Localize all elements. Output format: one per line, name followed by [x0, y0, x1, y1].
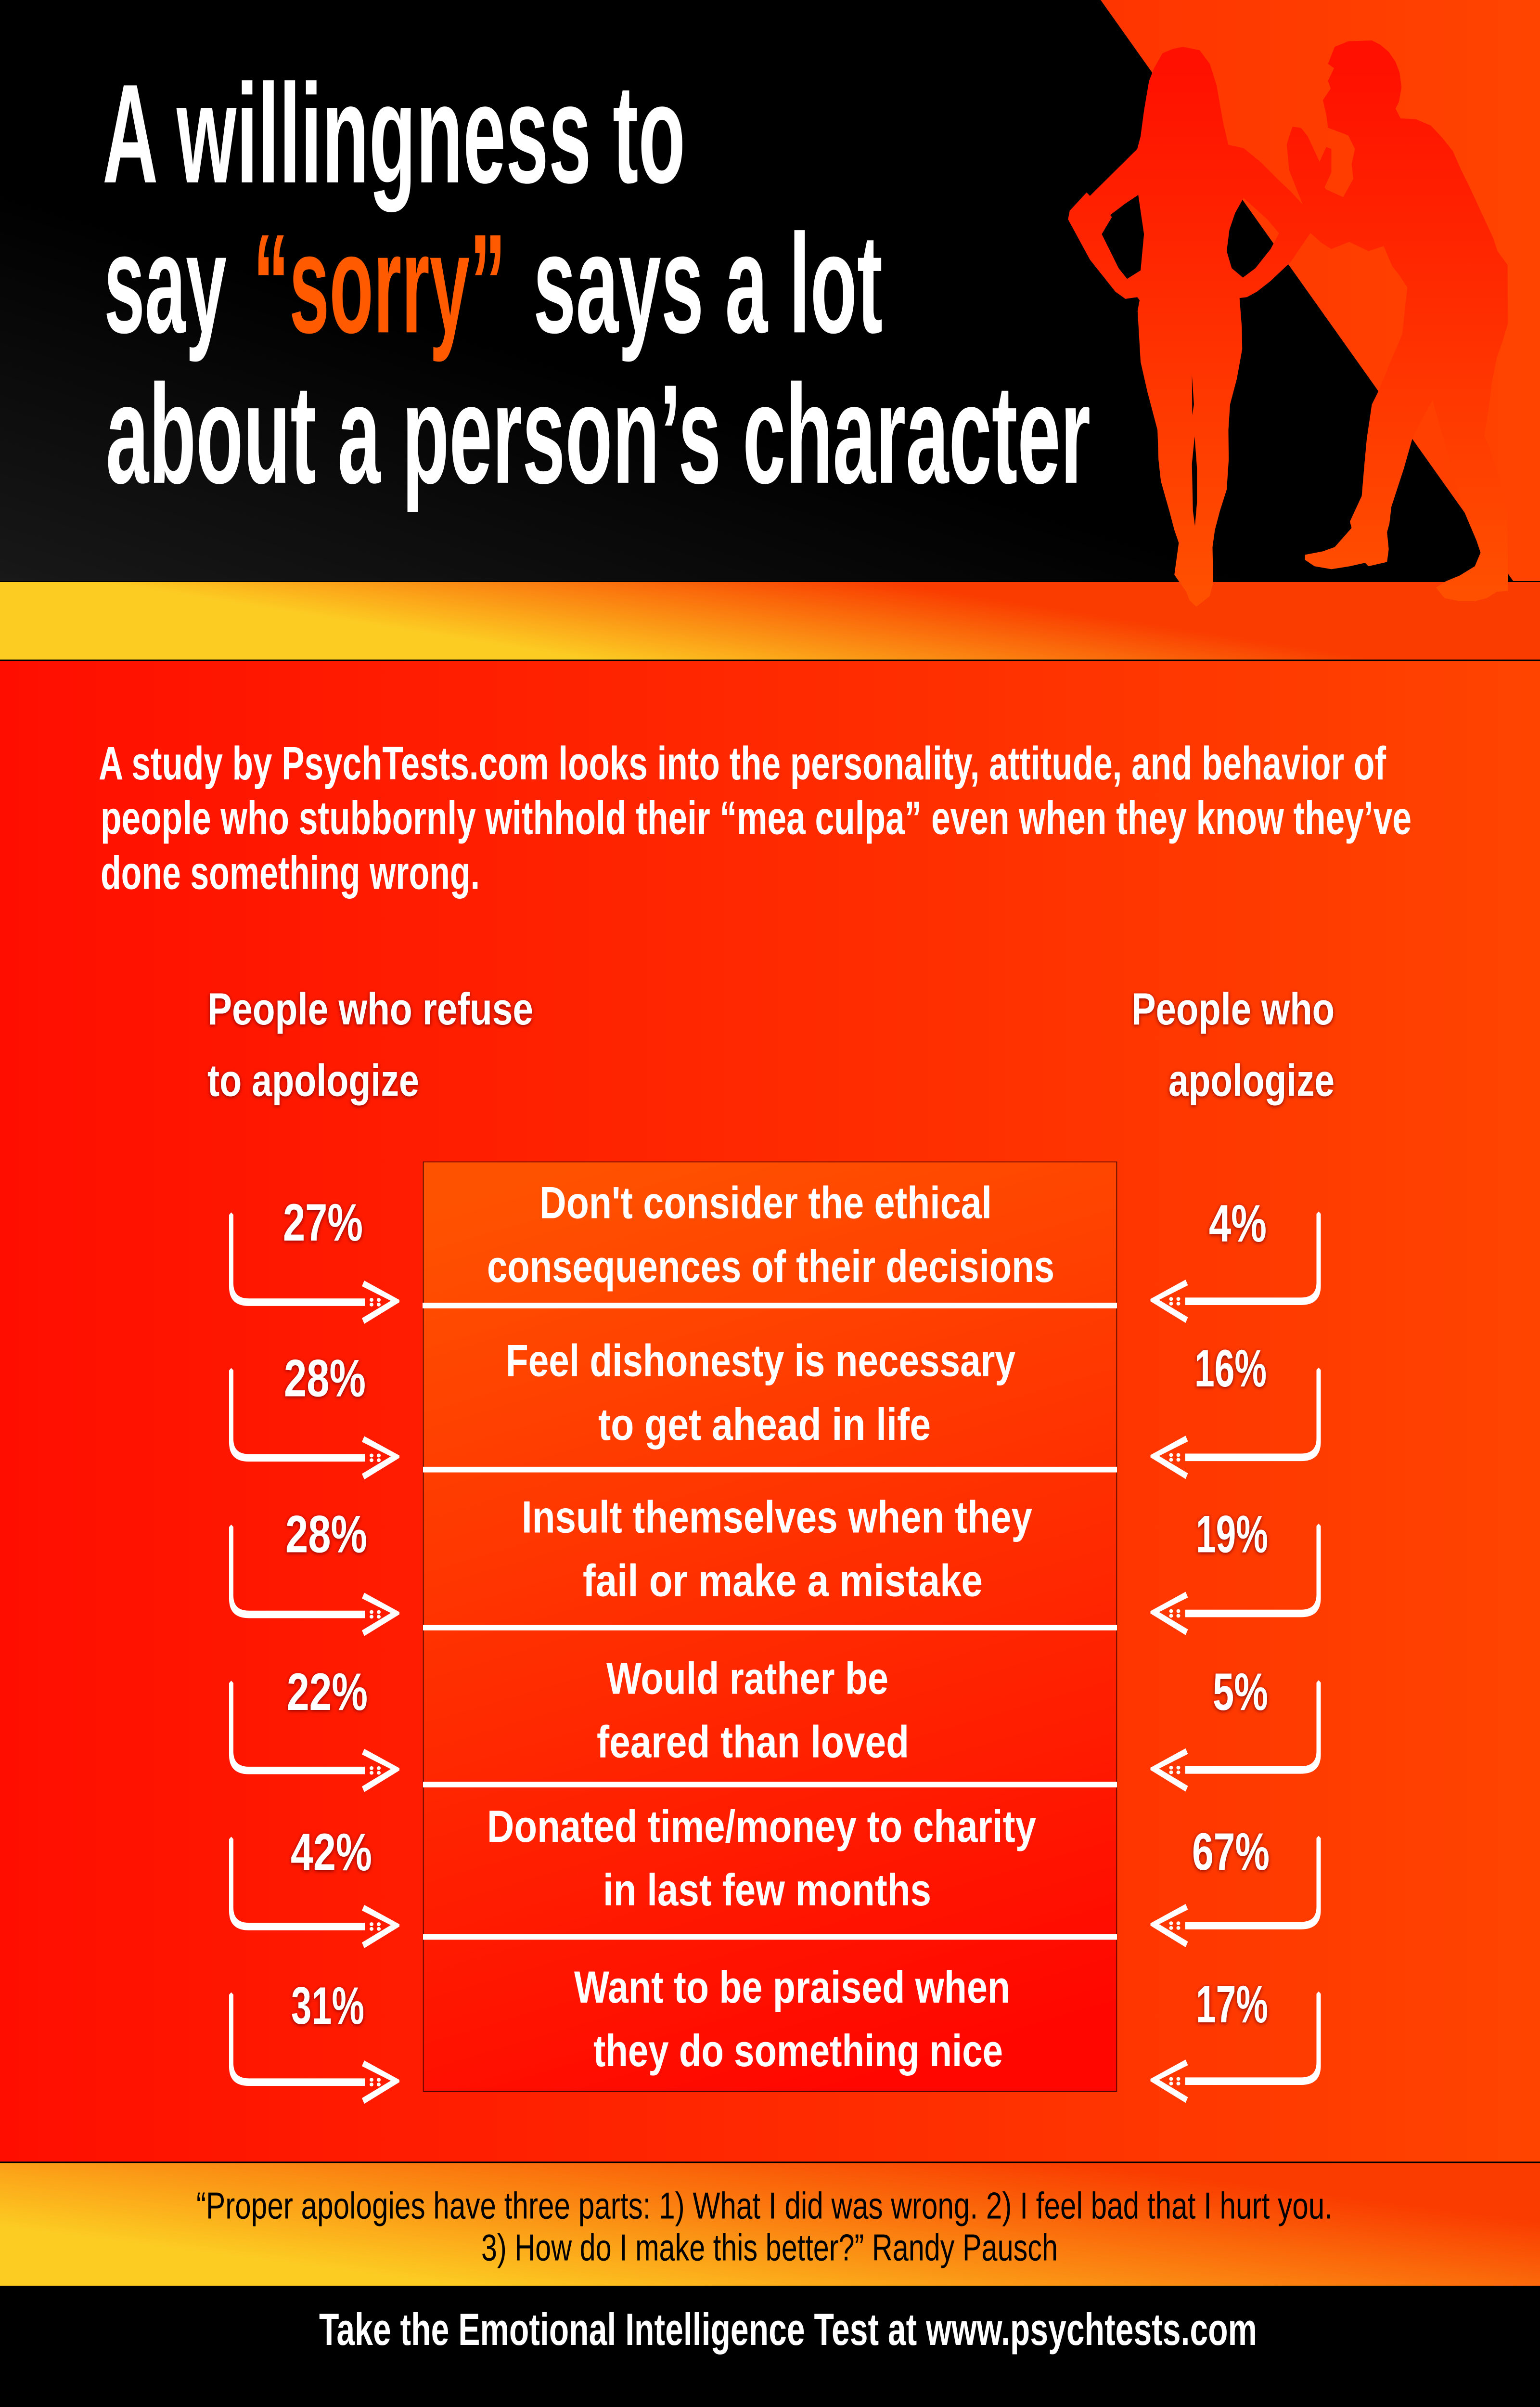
arrow: right row 1	[1150, 1212, 1321, 1323]
row 5 text	[487, 1801, 1036, 1915]
row 1 text: consequences of their decisions	[487, 1242, 1054, 1292]
column heading: people who refuse to apologize	[207, 984, 533, 1106]
arrow: right row 5	[1150, 1836, 1321, 1947]
row 3 text	[522, 1492, 1032, 1606]
arrow: left row 6	[229, 1993, 399, 2104]
silhouette: arguing couple	[1068, 40, 1508, 607]
table background	[424, 1162, 1116, 2091]
title	[103, 55, 1091, 514]
arrow: left row 4	[229, 1681, 399, 1792]
black header background	[0, 0, 1514, 582]
row 4 text	[597, 1654, 909, 1767]
column heading: people who refuse to apologize: People who refuse	[207, 984, 533, 1035]
column heading: people who apologize: People who	[1131, 984, 1335, 1035]
footer quote band	[0, 2161, 1540, 2286]
intro paragraph: done something wrong.	[101, 847, 480, 899]
column heading: people who refuse to apologize: to apologize	[207, 1055, 419, 1106]
left percentages: 31%	[291, 1977, 364, 2035]
arrow: right row 6	[1150, 1992, 1321, 2103]
left percentages: 42%	[291, 1823, 372, 1881]
row 1 text	[487, 1178, 1054, 1292]
row 5 text: in last few months	[603, 1865, 931, 1915]
intro paragraph	[99, 737, 1412, 899]
left percentages	[283, 1193, 372, 2035]
panel: comparison table	[423, 1162, 1117, 2091]
row 5 text: Donated time/money to charity	[487, 1801, 1036, 1852]
row 4 text: feared than loved	[597, 1717, 909, 1767]
left percentages: 28%	[285, 1505, 367, 1564]
footer call to action	[0, 2286, 1540, 2407]
header panel	[0, 0, 1540, 661]
right arrows	[1150, 1212, 1321, 2103]
right percentages	[1192, 1194, 1270, 2034]
right percentages: 4%	[1209, 1194, 1267, 1253]
right percentages: 19%	[1196, 1505, 1268, 1564]
arrow: left row 1	[229, 1213, 399, 1324]
quote text: 3) How do I make this better?” Randy Pausch	[481, 2226, 1058, 2268]
column heading: people who apologize	[1131, 984, 1335, 1106]
right percentages: 67%	[1192, 1823, 1270, 1881]
right percentages: 5%	[1213, 1663, 1268, 1721]
row 1 text: Don't consider the ethical	[539, 1178, 992, 1228]
right percentages: 16%	[1194, 1339, 1267, 1398]
row 2 text: Feel dishonesty is necessary	[506, 1335, 1015, 1386]
title: “sorry”	[253, 205, 506, 363]
left percentages: 28%	[284, 1349, 366, 1408]
arrow: left row 5	[229, 1837, 399, 1948]
quote text	[196, 2184, 1333, 2268]
row 2 text: to get ahead in life	[598, 1399, 931, 1450]
right percentages: 17%	[1196, 1975, 1268, 2034]
title: says a lot	[533, 205, 883, 363]
row 6 text: they do something nice	[593, 2026, 1003, 2076]
title: say	[104, 205, 227, 363]
row 6 text	[574, 1962, 1010, 2076]
silhouette: woman	[1068, 47, 1311, 607]
column heading: people who apologize: apologize	[1168, 1055, 1335, 1106]
title: A willingness to	[103, 55, 685, 213]
row 2 text	[506, 1335, 1015, 1450]
left percentages: 22%	[287, 1663, 368, 1721]
arrow: right row 3	[1150, 1524, 1321, 1635]
silhouette: man	[1287, 40, 1508, 601]
left arrows	[229, 1213, 399, 2104]
row 4 text: Would rather be	[606, 1654, 888, 1704]
arrow: right row 2	[1150, 1368, 1321, 1479]
arrow: left row 2	[229, 1368, 399, 1479]
header yellow band	[0, 582, 1540, 660]
arrow: left row 3	[229, 1525, 399, 1636]
row 3 text: Insult themselves when they	[522, 1492, 1032, 1542]
row 3 text: fail or make a mistake	[583, 1555, 983, 1606]
left percentages: 27%	[283, 1193, 363, 1252]
arrow: right row 4	[1150, 1680, 1321, 1792]
row 6 text: Want to be praised when	[574, 1962, 1010, 2013]
